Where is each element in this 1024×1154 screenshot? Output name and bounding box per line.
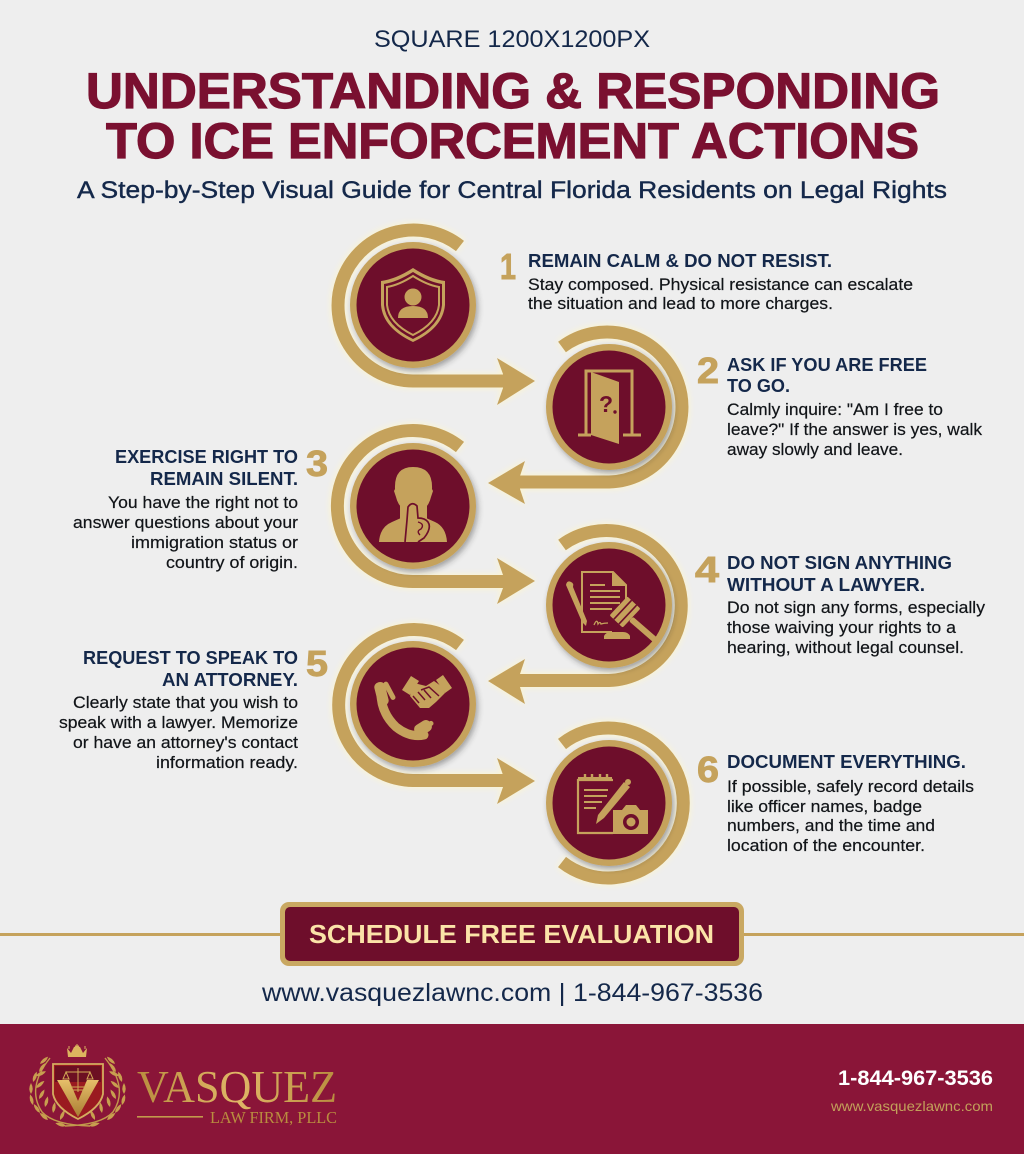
step 1 bbox=[338, 230, 913, 405]
heading 5 bbox=[83, 648, 298, 690]
body 4: hearing, without legal counsel. bbox=[727, 638, 964, 657]
logo wordmark: VASQUEZ bbox=[137, 1061, 337, 1112]
number 2: 2 bbox=[697, 350, 719, 391]
body 4: those waiving your rights to a bbox=[727, 618, 957, 637]
logo rule bbox=[137, 1116, 203, 1118]
title: UNDERSTANDING & RESPONDING bbox=[86, 63, 940, 119]
arrow: step 4 to 5 bbox=[488, 531, 681, 704]
shield top panel bbox=[55, 1066, 101, 1082]
body 1 bbox=[528, 275, 913, 313]
arrow: step 5 to 6 bbox=[339, 630, 535, 804]
heading 4: WITHOUT A LAWYER. bbox=[727, 575, 925, 595]
body 6: If possible, safely record details bbox=[727, 777, 974, 796]
number 5: 5 bbox=[306, 643, 328, 684]
body 5 bbox=[59, 693, 298, 772]
heading 2: TO GO. bbox=[727, 376, 790, 396]
arrow: step 2 to 3 bbox=[488, 332, 682, 504]
subtitle: A Step-by-Step Visual Guide for Central Florida Residents on Legal Rights bbox=[77, 177, 947, 204]
heading 6: DOCUMENT EVERYTHING. bbox=[727, 752, 966, 772]
arrow: step 1 to 2 bbox=[338, 230, 535, 405]
call to action band bbox=[0, 902, 1024, 966]
body 3: country of origin. bbox=[166, 553, 298, 572]
number 4: 4 bbox=[695, 549, 719, 590]
number 6: 6 bbox=[697, 749, 719, 790]
heading 5: AN ATTORNEY. bbox=[162, 670, 298, 690]
body 5: or have an attorney's contact bbox=[73, 733, 298, 752]
medallion 5 with phone and handshake icon bbox=[350, 641, 476, 767]
heading 2: ASK IF YOU ARE FREE bbox=[727, 355, 927, 375]
body 1: Stay composed. Physical resistance can escalate bbox=[528, 275, 913, 294]
contact line: www.vasquezlawnc.com | 1-844-967-3536 bbox=[261, 979, 763, 1007]
number 3: 3 bbox=[306, 443, 328, 484]
body 2 bbox=[727, 400, 983, 459]
number 1: 1 bbox=[500, 246, 516, 287]
logo emblem bbox=[29, 1044, 126, 1128]
step 6 bbox=[546, 728, 974, 878]
heading 1: REMAIN CALM & DO NOT RESIST. bbox=[528, 251, 832, 271]
body 2: away slowly and leave. bbox=[727, 440, 903, 459]
step 3 bbox=[73, 431, 535, 604]
left laurel bbox=[29, 1055, 90, 1128]
heading 4 bbox=[727, 553, 952, 595]
body 6: location of the encounter. bbox=[727, 836, 925, 855]
heading 4: DO NOT SIGN ANYTHING bbox=[727, 553, 952, 573]
body 5: Clearly state that you wish to bbox=[73, 693, 298, 712]
eyebrow label: SQUARE 1200X1200PX bbox=[374, 26, 650, 53]
medallion 6 with notepad and camera icon bbox=[546, 740, 672, 866]
body 6 bbox=[727, 777, 974, 855]
heading 3: EXERCISE RIGHT TO bbox=[115, 447, 298, 467]
body 3: immigration status or bbox=[131, 533, 298, 552]
title bbox=[86, 63, 940, 169]
body 4: Do not sign any forms, especially bbox=[727, 598, 986, 617]
heading 3 bbox=[115, 447, 298, 489]
footer bbox=[0, 1024, 1024, 1154]
arrow: step 3 to 4 bbox=[337, 431, 535, 604]
body 4 bbox=[727, 598, 986, 657]
body 2: Calmly inquire: "Am I free to bbox=[727, 400, 943, 419]
scales and column bbox=[63, 1068, 93, 1092]
ring: step 6 bbox=[562, 728, 683, 878]
step 4 bbox=[488, 531, 986, 704]
medallion 3 with silence icon bbox=[350, 443, 476, 569]
logo tagline: LAW FIRM, PLLC bbox=[210, 1108, 337, 1127]
medallion 4 with document and gavel icon bbox=[546, 542, 672, 668]
body 2: leave?" If the answer is yes, walk bbox=[727, 420, 983, 439]
body 3: You have the right not to bbox=[108, 493, 298, 512]
footer website: www.vasquezlawnc.com bbox=[830, 1098, 993, 1114]
body 6: numbers, and the time and bbox=[727, 816, 935, 835]
heading 3: REMAIN SILENT. bbox=[150, 469, 298, 489]
body 3: answer questions about your bbox=[73, 513, 298, 532]
button bbox=[280, 902, 744, 966]
right laurel bbox=[65, 1055, 126, 1128]
body 5: information ready. bbox=[156, 753, 298, 772]
step 5 bbox=[59, 630, 535, 804]
body 6: like officer names, badge bbox=[727, 797, 922, 816]
monogram V bbox=[57, 1080, 99, 1117]
title: TO ICE ENFORCEMENT ACTIONS bbox=[106, 113, 919, 169]
body 3 bbox=[73, 493, 298, 572]
body 5: speak with a lawyer. Memorize bbox=[59, 713, 298, 732]
medallion 2 with door icon: ? bbox=[599, 391, 613, 417]
body 1: the situation and lead to more charges. bbox=[528, 294, 833, 313]
heading 2 bbox=[727, 355, 927, 396]
step 2 bbox=[488, 332, 983, 504]
heading 5: REQUEST TO SPEAK TO bbox=[83, 648, 298, 668]
shield bbox=[53, 1064, 103, 1119]
crown bbox=[67, 1044, 87, 1057]
medallion 2 with door icon bbox=[546, 344, 672, 470]
button: SCHEDULE FREE EVALUATION bbox=[309, 919, 714, 949]
medallion 1 with shield icon bbox=[350, 242, 476, 368]
footer phone: 1-844-967-3536 bbox=[838, 1067, 993, 1090]
